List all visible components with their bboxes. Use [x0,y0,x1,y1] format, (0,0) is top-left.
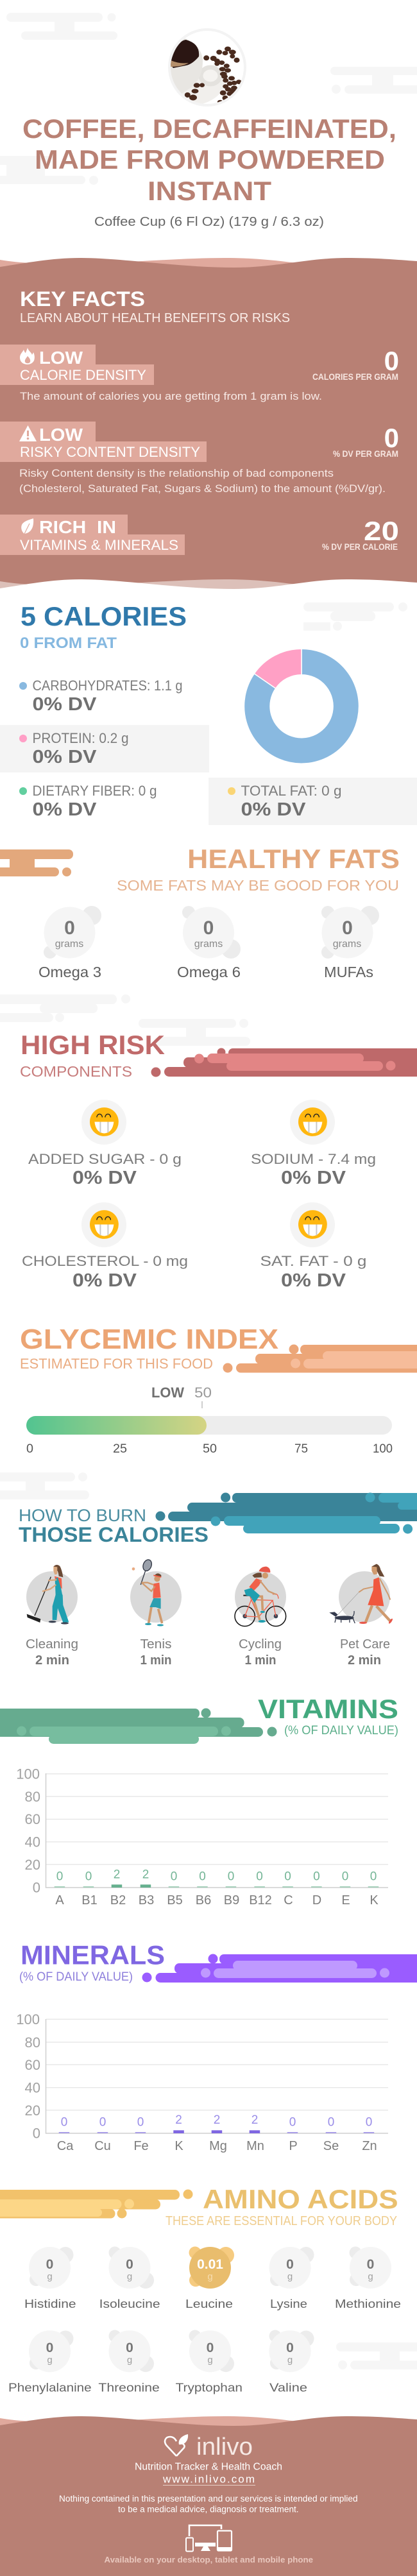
bar chart: vitamins: 2 [142,1868,149,1881]
logo: heart and leaf [165,2434,188,2456]
macro: carbohydrates: CARBOHYDRATES: 1.1 g [32,678,182,694]
title: INSTANT [148,176,271,206]
panel: glycemic index [20,1324,417,1456]
amino acid: phenylalanine: Phenylalanine [8,2382,92,2394]
footer [0,2416,417,2576]
amino acid: tryptophan: g [207,2355,213,2366]
amino acid: threonine: Threonine [98,2382,160,2394]
bar chart: vitamins: 0 [56,1870,63,1884]
fact: calorie density [0,345,399,402]
activity: pet care [329,1564,393,1668]
background cloud top left [6,13,117,40]
fat: omega 3: Omega 3 [38,964,101,980]
bar chart: vitamins: 20 [25,1857,40,1873]
bar chart: minerals: 2 [214,2113,220,2127]
decorative heading bars [0,1708,277,1744]
amino acid: leucine: Leucine [185,2298,233,2310]
heading: healthy fats: HEALTHY FATS [187,844,400,874]
bar chart: minerals: 0 [289,2115,296,2129]
activity: tennis [130,1558,182,1668]
amino acid: lysine [269,2247,314,2310]
fat: omega 6: grams [194,939,223,950]
header section [0,13,417,229]
subheading: ESTIMATED FOR THIS FOOD [20,1356,213,1372]
bar chart: minerals: K [174,2139,183,2153]
panel: how to burn those calories [0,1472,417,1668]
bar chart: vitamins: 0 [370,1870,377,1884]
logo wordmark: inlivo [196,2434,253,2461]
panel: vitamins [0,1694,398,1907]
amino acid: valine: 0 [286,2341,294,2355]
amino acid: histidine: 0 [46,2257,53,2272]
title [22,114,396,206]
bar chart: vitamins: 80 [25,1789,40,1805]
bar chart: vitamins: B1 [81,1893,98,1907]
amino acid: threonine: 0 [126,2341,133,2355]
amino acid: leucine [185,2247,234,2310]
subheading: LEARN ABOUT HEALTH BENEFITS OR RISKS [20,311,290,325]
icon: warning triangle [19,425,37,441]
macro: dietary fiber: 0% DV [32,799,97,820]
fact: calorie density: LOW [39,348,83,368]
subheading: THESE ARE ESSENTIAL FOR YOUR BODY [166,2214,397,2228]
bar chart: minerals: Se [323,2139,339,2153]
bar chart: minerals: 0 [328,2115,334,2129]
bar chart: minerals: Zn [362,2139,377,2153]
bar chart: vitamins [16,1766,388,1907]
component: added sugar [28,1100,182,1188]
panel: high risk components [0,994,417,1291]
fact: rich in vitamins and minerals: % DV PER CALORIE [322,542,398,552]
subheading: SOME FATS MAY BE GOOD FOR YOU [117,877,399,894]
bar chart: minerals: 0 [33,2125,40,2142]
amino acid: phenylalanine [8,2330,92,2394]
component: saturated fat: SAT. FAT - 0 g [260,1253,367,1269]
panel background with waves [0,258,417,600]
amino acid: tryptophan [176,2330,243,2394]
bar chart: minerals: 100 [16,2011,40,2027]
fat: omega 6: Omega 6 [177,964,241,980]
heading: key facts: KEY FACTS [20,287,145,311]
icon: flame [20,348,35,364]
bar chart: vitamins: B2 [110,1893,126,1907]
bar chart: vitamins: B6 [196,1893,211,1907]
bar chart: vitamins: D [312,1893,321,1907]
bar chart: vitamins: 0 [284,1870,291,1884]
bar chart: vitamins: B12 [249,1893,272,1907]
component: saturated fat [260,1202,367,1291]
subheading: (% OF DAILY VALUE) [284,1724,398,1737]
activity: cycling: Cycling [239,1637,282,1651]
fact: rich in vitamins and minerals: 20 [364,516,399,546]
bar chart: minerals: 0 [99,2115,106,2129]
bar chart: minerals: 0 [366,2115,372,2129]
activity: cleaning: 2 min [35,1653,69,1668]
bar chart: vitamins: 0 [313,1870,320,1884]
fact: risky content density: LOW [39,425,83,445]
bar chart: vitamins: B3 [139,1893,154,1907]
fact: risky content density: Risky Content density is the relationship of bad components [19,467,334,479]
fat: omega 3: 0 [64,917,75,939]
bar chart: minerals [16,2011,388,2153]
fact: calorie density: 0 [384,346,399,376]
bar chart: vitamins: 60 [25,1811,40,1827]
panel: amino acids [0,2184,417,2394]
amino acid: histidine: g [47,2271,53,2282]
website link: www.inlivo.com [162,2473,255,2486]
component: cholesterol [22,1202,188,1291]
fat: omega 6 [177,906,241,980]
activity: cycling [235,1567,286,1668]
background cloud left [0,156,98,185]
heading: glycemic index: GLYCEMIC INDEX [20,1324,278,1355]
gauge scale: 75 [294,1442,308,1456]
amino acid: tryptophan: 0 [207,2341,214,2355]
macro: carbohydrates [19,678,182,715]
band: total fat background [208,778,417,825]
bar chart: vitamins: 0 [256,1870,263,1884]
background cloud [0,1472,89,1499]
subheading: components: COMPONENTS [20,1063,132,1080]
bar chart: minerals: 0 [137,2115,144,2129]
macro: total fat [228,783,341,820]
fat: mufas: 0 [342,917,353,939]
gauge label: LOW [151,1385,184,1401]
amino acid: lysine: 0 [286,2257,294,2272]
bar chart: vitamins: A [55,1893,64,1907]
bar chart: minerals: 60 [25,2057,40,2073]
decorative heading bars [0,849,73,876]
bar chart: minerals: 2 [251,2113,258,2127]
amino acid: isoleucine: Isoleucine [99,2298,160,2310]
decorative heading bars [0,2189,192,2219]
background cloud [336,2342,417,2369]
amino acid: methionine [335,2247,401,2310]
serving size: Coffee Cup (6 Fl Oz) (179 g / 6.3 oz) [94,215,324,229]
component: sodium [251,1100,376,1188]
fat: omega 3: grams [55,939,83,950]
decorative heading bars [151,1048,417,1077]
heading: amino acids: AMINO ACIDS [203,2184,398,2214]
fact: rich in vitamins and minerals [0,515,399,555]
decorative heading bars [155,1492,417,1533]
component: cholesterol: CHOLESTEROL - 0 mg [22,1253,188,1269]
fat: omega 3 [38,906,101,980]
amino acid: valine [269,2330,314,2394]
gauge label [151,1385,212,1408]
fact: risky content density: % DV PER GRAM [333,448,398,459]
fat: mufas [321,906,379,980]
activity: cleaning [26,1565,78,1668]
heading: how to burn: HOW TO BURN [19,1506,146,1525]
bar chart: vitamins: 0 [85,1870,92,1884]
bar chart: minerals: P [289,2139,298,2153]
title: MADE FROM POWDERED [35,144,385,175]
background cloud [303,602,407,631]
macro: dietary fiber: DIETARY FIBER: 0 g [32,783,157,799]
heading: those calories: THOSE CALORIES [19,1523,208,1546]
bar chart: vitamins: 100 [16,1766,40,1782]
panel: minerals [16,1940,417,2153]
component: cholesterol: 0% DV [72,1270,137,1291]
amino acid: phenylalanine: g [47,2355,53,2366]
component: saturated fat: 0% DV [281,1270,346,1291]
bar chart: minerals: Cu [94,2139,111,2153]
bar chart: minerals: 2 [175,2113,182,2127]
amino acid: valine: Valine [269,2382,307,2394]
bar chart: minerals: Fe [133,2139,149,2153]
bar chart: vitamins: B5 [167,1893,183,1907]
amino acid: isoleucine [99,2247,160,2310]
footer background with waves [0,2416,417,2576]
activity: pet care: Pet Care [340,1637,390,1651]
bar chart: vitamins: E [341,1893,350,1907]
activity: pet care: 2 min [348,1653,381,1668]
availability note: Available on your desktop, tablet and mobile phone [104,2555,313,2564]
title: COFFEE, DECAFFEINATED, [22,114,396,144]
amino acid: isoleucine: 0 [126,2257,133,2272]
fact: risky content density [0,422,399,495]
panel: key facts [0,258,417,600]
amino acid: lysine: Lysine [270,2298,307,2310]
gauge scale: 25 [113,1442,127,1456]
macro: protein: PROTEIN: 0.2 g [32,730,128,746]
bar chart: minerals: 80 [25,2034,40,2051]
gauge scale: 0 [26,1442,33,1456]
background cloud right [330,67,417,94]
fat: mufas: MUFAs [324,964,373,980]
gauge scale [26,1442,393,1456]
gauge scale: 100 [373,1442,393,1456]
subheading: (% OF DAILY VALUE) [19,1970,133,1984]
amino acid: histidine: Histidine [24,2298,76,2310]
gauge label: 50 [194,1385,212,1401]
icon: leaf [21,518,33,534]
fact: calorie density: CALORIE DENSITY [20,367,146,383]
heading: minerals: MINERALS [21,1940,165,1970]
subheading: from fat: 0 FROM FAT [20,635,117,652]
tagline: Nutrition Tracker & Health Coach [135,2462,282,2473]
amino acid: isoleucine: g [127,2271,132,2282]
heading: 5 calories: 5 CALORIES [21,601,187,631]
icon: desktop, tablet and phone [186,2525,232,2551]
heading: high risk: HIGH RISK [21,1030,165,1060]
disclaimer: to be a medical advice, diagnosis or treatment. [118,2505,299,2514]
bar chart: vitamins: K [370,1893,379,1907]
bar chart: vitamins: 0 [33,1880,40,1895]
bar chart: vitamins: 2 [114,1868,120,1881]
amino acid: methionine: Methionine [335,2298,401,2310]
macro: dietary fiber [19,783,157,820]
macro: protein: 0% DV [32,747,97,767]
bar chart: vitamins: B9 [224,1893,239,1907]
amino acid: phenylalanine: 0 [46,2341,53,2355]
amino acid: leucine: 0.01 [197,2257,223,2272]
donut chart [244,649,359,763]
amino acid: threonine [98,2330,160,2394]
bar chart: vitamins: 0 [342,1870,348,1884]
amino acid: tryptophan: Tryptophan [176,2382,243,2394]
amino acid: methionine: g [368,2271,373,2282]
gauge scale: 50 [203,1442,217,1456]
component: added sugar: 0% DV [72,1168,137,1188]
amino acid: lysine: g [287,2271,293,2282]
panel: healthy fats [0,844,400,980]
amino acid: valine: g [287,2355,293,2366]
bar chart: vitamins: 40 [25,1834,40,1850]
decorative heading bars [223,1345,417,1373]
disclaimer: Nothing contained in this presentation and our services is intended or implied [59,2494,358,2503]
amino acid: methionine: 0 [367,2257,374,2272]
decorative heading bars [142,1954,417,1983]
heading: vitamins: VITAMINS [258,1694,398,1724]
fact: risky content density: (Cholesterol, Saturated Fat, Sugars & Sodium) to the amount (%DV/gr). [19,482,386,495]
fact: calorie density: CALORIES PER GRAM [312,371,398,382]
fact: risky content density: 0 [384,423,399,453]
bar chart: vitamins: C [284,1893,293,1907]
amino acid: histidine [24,2247,76,2310]
macro: carbohydrates: 0% DV [32,694,97,715]
bar chart: minerals: 0 [61,2115,67,2129]
panel: calories [0,601,417,825]
bar chart: minerals: Ca [57,2139,74,2153]
amino acid: leucine: g [207,2271,213,2282]
activity: tennis: Tenis [140,1637,172,1651]
activity: tennis: 1 min [140,1653,172,1668]
band: protein background [0,725,209,772]
background clouds [0,994,250,1046]
disclaimer [59,2494,358,2514]
bar chart: vitamins: 0 [171,1870,177,1884]
fact: calorie density: The amount of calories you are getting from 1 gram is low. [20,390,322,402]
fat: omega 6: 0 [203,917,214,939]
fact: rich in vitamins and minerals: VITAMINS & MINERALS [20,537,178,553]
bar chart: vitamins: 0 [228,1870,234,1884]
bar chart: minerals: 20 [25,2103,40,2119]
activity: cycling: 1 min [245,1653,276,1668]
macro: protein [19,730,128,767]
fat: mufas: grams [333,939,361,950]
component: added sugar: ADDED SUGAR - 0 g [28,1151,182,1167]
food photo: coffee cup and beans [168,28,246,112]
activity: cleaning: Cleaning [26,1637,78,1651]
macro: total fat: 0% DV [241,799,306,820]
bar chart: vitamins: 0 [199,1870,206,1884]
fact: rich in vitamins and minerals: RICH IN [39,517,116,537]
gauge bar [26,1416,392,1435]
fact: risky content density: RISKY CONTENT DENSITY [20,444,200,460]
amino acid: threonine: g [127,2355,132,2366]
component: sodium: 0% DV [281,1168,346,1188]
bar chart: minerals: Mg [209,2139,227,2153]
component: sodium: SODIUM - 7.4 mg [251,1151,376,1167]
macro: total fat: TOTAL FAT: 0 g [241,783,341,799]
bar chart: minerals: 40 [25,2080,40,2095]
bar chart: minerals: Mn [246,2139,264,2153]
